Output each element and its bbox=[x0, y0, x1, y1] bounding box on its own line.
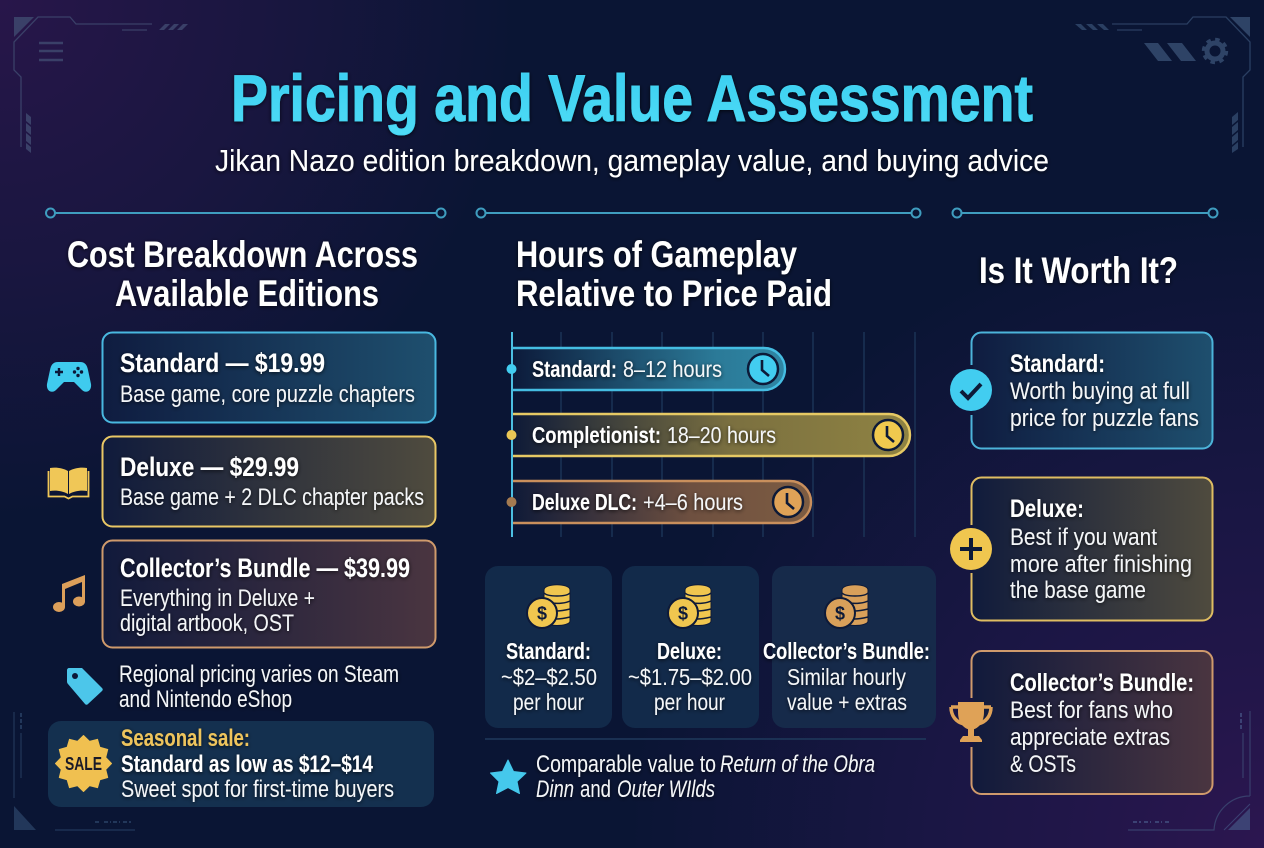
bar: Completionist hours bbox=[512, 414, 910, 456]
card: Standard cost per hour: ~$2–$2.50 bbox=[501, 664, 597, 690]
timeline grid bbox=[561, 332, 915, 537]
bar: Standard hours: 8–12 hours bbox=[623, 356, 722, 382]
callout: seasonal sale: Seasonal sale: bbox=[121, 725, 250, 752]
bar: Standard hours: Standard: bbox=[532, 356, 617, 382]
card: Standard price bbox=[102, 332, 436, 422]
card: Collector's Bundle verdict: & OSTs bbox=[1010, 751, 1076, 778]
icon: music note bbox=[53, 575, 85, 612]
title: Pricing and Value Assessment bbox=[231, 61, 1033, 135]
card: Standard price: Standard — $19.99 bbox=[120, 348, 325, 378]
icon: price tag bbox=[67, 668, 103, 705]
HUD frame: bottom right bbox=[1128, 711, 1250, 830]
icon: gamepad bbox=[47, 362, 91, 392]
icon: star bbox=[490, 760, 526, 794]
bar: Completionist hours: 18–20 hours bbox=[667, 422, 776, 448]
note: comparable value: Outer WIlds bbox=[617, 776, 715, 803]
note: regional pricing bbox=[119, 661, 399, 713]
card: Standard cost per hour: Standard: bbox=[506, 638, 591, 664]
heading: cost breakdown: Cost Breakdown Across bbox=[67, 234, 418, 275]
heading: hours of gameplay: Relative to Price Paid bbox=[516, 273, 832, 314]
column dividers bbox=[46, 208, 1218, 218]
bar: Standard hours bbox=[512, 348, 785, 390]
bar: Deluxe DLC hours: Deluxe DLC: bbox=[532, 489, 637, 515]
card: Standard verdict: Worth buying at full bbox=[1010, 378, 1190, 405]
callout: seasonal sale: Sweet spot for first-time buyers bbox=[121, 776, 394, 803]
card: Deluxe verdict: the base game bbox=[1010, 577, 1146, 604]
card: Collector's Bundle cost per hour: Collector’s Bundle: bbox=[763, 638, 930, 664]
card: Collector's Bundle price: Everything in Deluxe + bbox=[120, 585, 315, 612]
note: comparable value: Dinn bbox=[536, 776, 574, 803]
icon: coins: $ bbox=[537, 604, 547, 624]
card: Collector's Bundle price bbox=[102, 540, 436, 648]
card: Standard verdict: Standard: bbox=[1010, 350, 1105, 378]
card: Deluxe price: Deluxe — $29.99 bbox=[120, 452, 299, 482]
icon: clock bbox=[748, 354, 778, 384]
icon: book bbox=[48, 468, 88, 498]
icon: trophy bbox=[951, 702, 991, 742]
note: comparable value bbox=[536, 751, 875, 803]
note: comparable value: Return of the Obra bbox=[720, 751, 875, 778]
card: Collector's Bundle price: digital artbook, OST bbox=[120, 610, 294, 637]
callout: seasonal sale: Standard as low as $12–$14 bbox=[121, 751, 374, 778]
card: Collector's Bundle cost per hour: value + extras bbox=[787, 689, 907, 715]
icon: sale badge bbox=[56, 736, 112, 792]
card: Standard cost per hour: per hour bbox=[513, 689, 584, 715]
icon: coins: $ bbox=[835, 604, 845, 624]
card: Deluxe verdict bbox=[950, 478, 1212, 620]
heading: cost breakdown bbox=[67, 234, 418, 314]
card: Deluxe cost per hour bbox=[622, 566, 759, 728]
icon: coins: $ bbox=[678, 604, 688, 624]
card: Deluxe verdict: Best if you want bbox=[1010, 524, 1157, 551]
card: Collector's Bundle cost per hour bbox=[763, 566, 936, 728]
heading: cost breakdown: Available Editions bbox=[115, 273, 379, 314]
HUD frame: bottom left bbox=[14, 712, 135, 830]
subtitle: Jikan Nazo edition breakdown, gameplay value, and buying advice bbox=[215, 143, 1049, 178]
card: Deluxe cost per hour: ~$1.75–$2.00 bbox=[628, 664, 752, 690]
icon: clock bbox=[773, 487, 803, 517]
card: Deluxe verdict: more after finishing bbox=[1010, 551, 1192, 578]
bar: Deluxe DLC hours: +4–6 hours bbox=[643, 489, 743, 515]
card: Deluxe verdict: Deluxe: bbox=[1010, 495, 1084, 523]
note: regional pricing: Regional pricing varies on Steam bbox=[119, 661, 399, 688]
timeline axis bbox=[506, 332, 516, 537]
icon: coins bbox=[825, 585, 868, 628]
card: Collector's Bundle verdict: Collector’s Bundle: bbox=[1010, 669, 1194, 697]
card: Deluxe price bbox=[102, 436, 436, 526]
card: Standard price: Base game, core puzzle chapters bbox=[120, 381, 415, 408]
icon: plus bbox=[950, 528, 992, 570]
card: Collector's Bundle cost per hour: Similar hourly bbox=[787, 664, 906, 690]
HUD frame: top right bbox=[1075, 17, 1250, 153]
card: Deluxe cost per hour: Deluxe: bbox=[657, 638, 722, 664]
heading: hours of gameplay bbox=[516, 234, 832, 314]
bar: Deluxe DLC hours bbox=[512, 481, 811, 523]
card: Standard cost per hour bbox=[485, 566, 612, 728]
callout: seasonal sale bbox=[48, 721, 434, 807]
HUD frame: top left bbox=[14, 17, 188, 153]
bar: Completionist hours: Completionist: bbox=[532, 422, 661, 448]
icon: clock bbox=[873, 420, 903, 450]
heading: is it worth it: Is It Worth It? bbox=[979, 250, 1178, 291]
icon: check bbox=[950, 369, 992, 411]
card: Standard verdict: price for puzzle fans bbox=[1010, 405, 1199, 432]
icon: coins bbox=[668, 585, 711, 628]
card: Collector's Bundle verdict: appreciate extras bbox=[1010, 724, 1170, 751]
card: Deluxe price: Base game + 2 DLC chapter packs bbox=[120, 484, 424, 511]
card: Collector's Bundle price: Collector’s Bundle — $39.99 bbox=[120, 553, 410, 583]
card: Collector's Bundle verdict bbox=[951, 651, 1212, 794]
note: comparable value: Comparable value to bbox=[536, 751, 716, 778]
icon: sale badge: SALE bbox=[65, 754, 102, 774]
icon: coins bbox=[527, 585, 570, 628]
heading: hours of gameplay: Hours of Gameplay bbox=[516, 234, 797, 275]
card: Deluxe cost per hour: per hour bbox=[654, 689, 725, 715]
note: regional pricing: and Nintendo eShop bbox=[119, 686, 292, 713]
card: Standard verdict bbox=[950, 332, 1212, 448]
card: Collector's Bundle verdict: Best for fans who bbox=[1010, 697, 1173, 724]
note: comparable value: and bbox=[580, 776, 611, 803]
